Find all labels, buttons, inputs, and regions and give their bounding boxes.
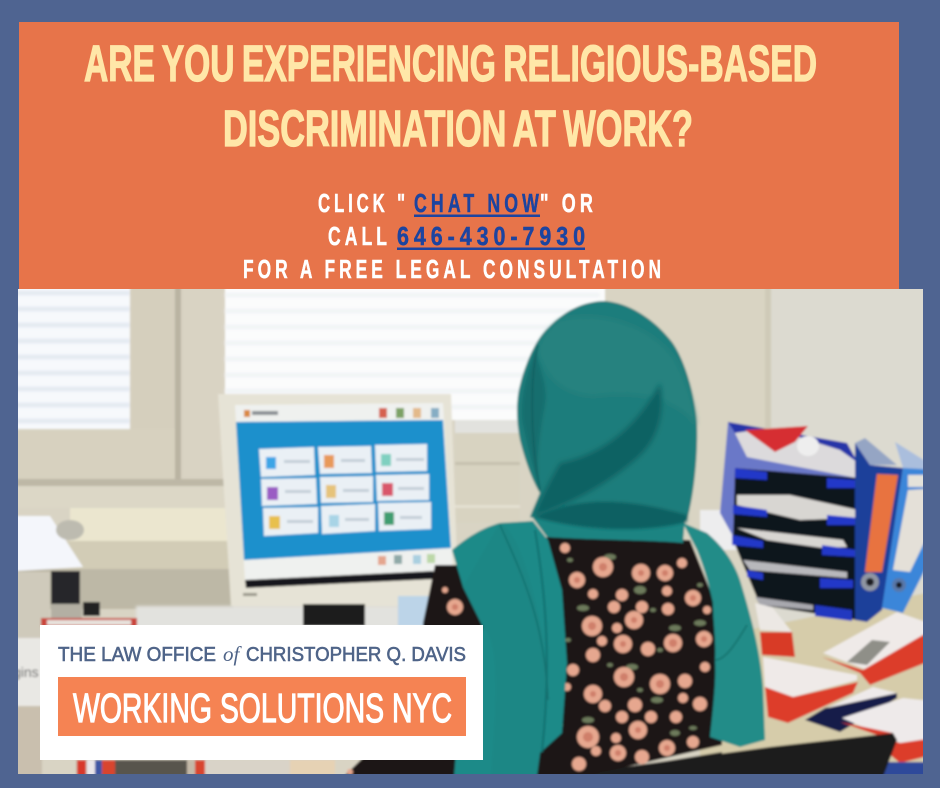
navy item under chair — [882, 760, 923, 774]
monitor — [218, 394, 457, 626]
leaves — [557, 554, 706, 736]
firm name: THE LAW OFFICE — [58, 644, 216, 666]
firm name: CHRISTOPHER Q. DAVIS — [246, 644, 466, 666]
firm name — [58, 642, 466, 666]
text fragment behind logo: gins — [13, 664, 39, 680]
rose centres — [452, 563, 707, 756]
firm name: of — [223, 642, 242, 666]
stationery and phone at left — [0, 516, 335, 788]
black chair back — [587, 732, 898, 774]
call to action text: " OR — [540, 188, 597, 218]
call to action text — [243, 188, 665, 284]
red document boxes — [755, 603, 940, 763]
teal scarf drapes — [452, 518, 765, 788]
call to action text: CALL — [328, 221, 391, 251]
call to action text: 646-430-7930 — [397, 221, 590, 251]
hijab head — [517, 301, 697, 529]
call to action text: CHAT NOW — [414, 188, 543, 218]
floral dress — [330, 537, 722, 788]
logo panel — [40, 625, 483, 760]
woman in hijab — [330, 301, 765, 788]
heading — [84, 35, 817, 157]
wall and window backdrop — [0, 270, 940, 788]
photo: office scene — [0, 270, 940, 788]
panel: orange header — [19, 22, 899, 290]
roses — [347, 543, 712, 775]
orange brand bar — [58, 677, 466, 736]
letter tray and binders — [720, 422, 940, 622]
logo panel: WORKING SOLUTIONS NYC — [73, 685, 452, 731]
call to action text: FOR A FREE LEGAL CONSULTATION — [243, 254, 665, 284]
chair overlap on hem — [670, 750, 723, 762]
call to action text: CLICK " — [318, 188, 409, 218]
heading: DISCRIMINATION AT WORK? — [223, 100, 693, 157]
